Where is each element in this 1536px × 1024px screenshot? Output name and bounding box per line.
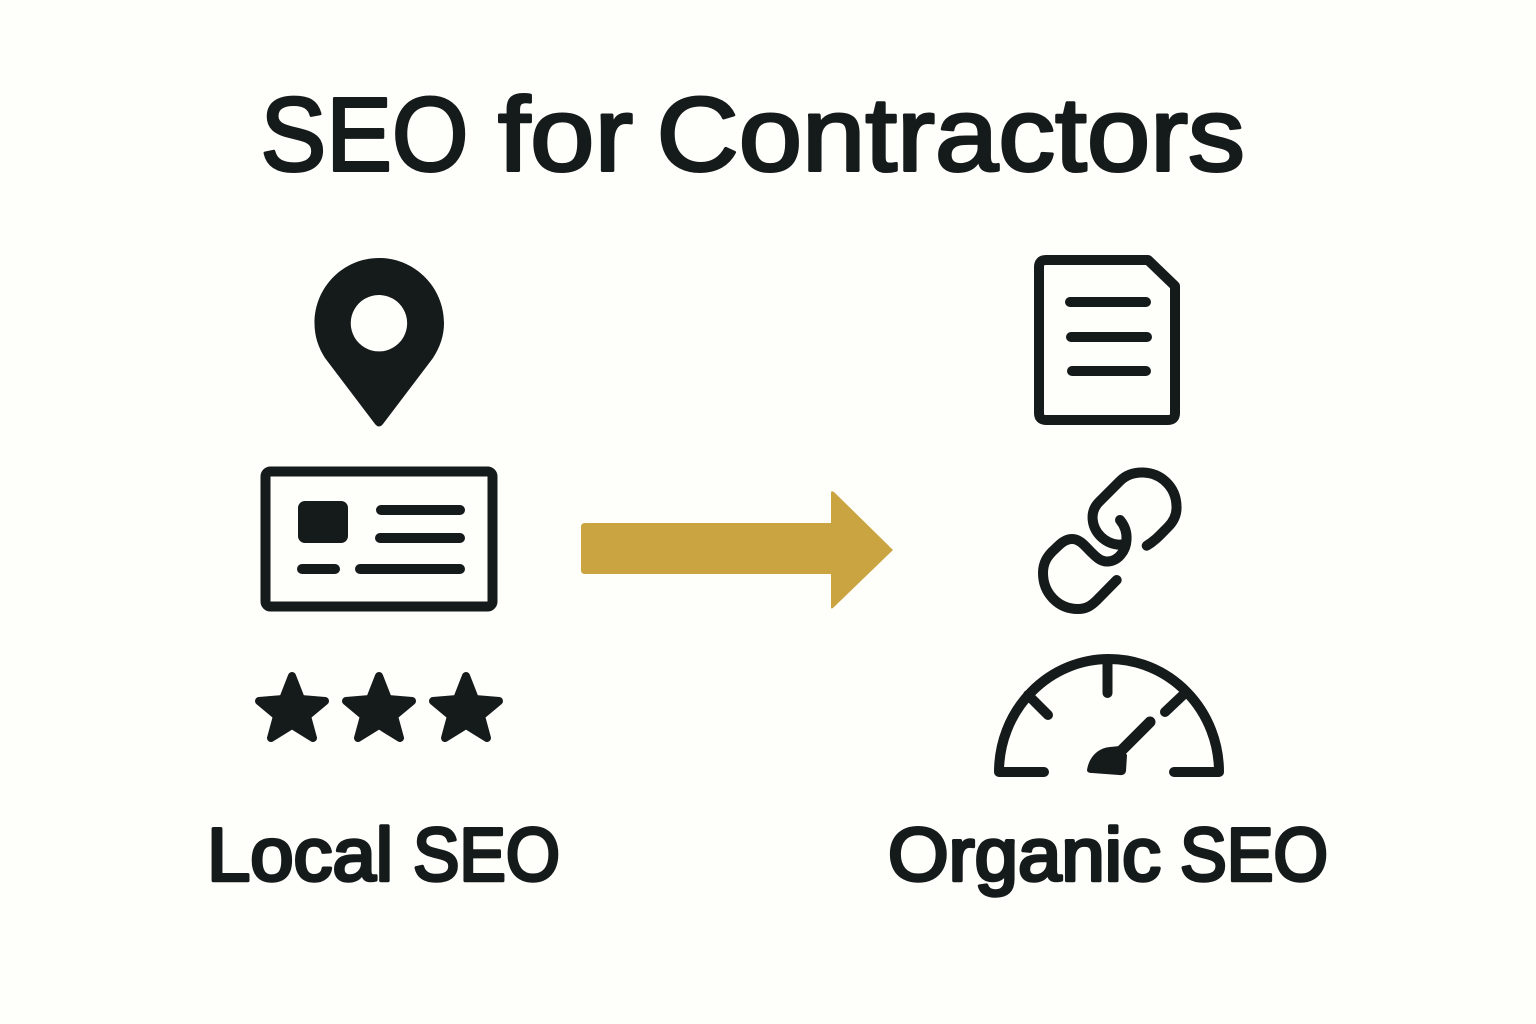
arrow: local to organic (581, 491, 893, 608)
title: Contractors (656, 76, 1245, 194)
panel: organic SEO (888, 260, 1328, 896)
icon: business listing card (266, 472, 492, 606)
label: Local SEO: Local (207, 812, 393, 896)
icon: speedometer gauge (999, 659, 1219, 775)
label: Organic SEO: Organic (888, 812, 1161, 896)
title: SEO (260, 76, 468, 194)
icon: chain link (1043, 472, 1177, 609)
title (260, 76, 1245, 194)
label: Organic SEO: SEO (1180, 812, 1328, 896)
panel: local SEO (207, 258, 560, 896)
label: Local SEO: SEO (413, 812, 560, 896)
label: Organic SEO (888, 812, 1328, 896)
icon: document (1039, 260, 1175, 420)
icon: three review stars (259, 676, 499, 738)
label: Local SEO (207, 812, 560, 896)
title: for (498, 76, 633, 194)
icon: map pin (314, 258, 444, 426)
